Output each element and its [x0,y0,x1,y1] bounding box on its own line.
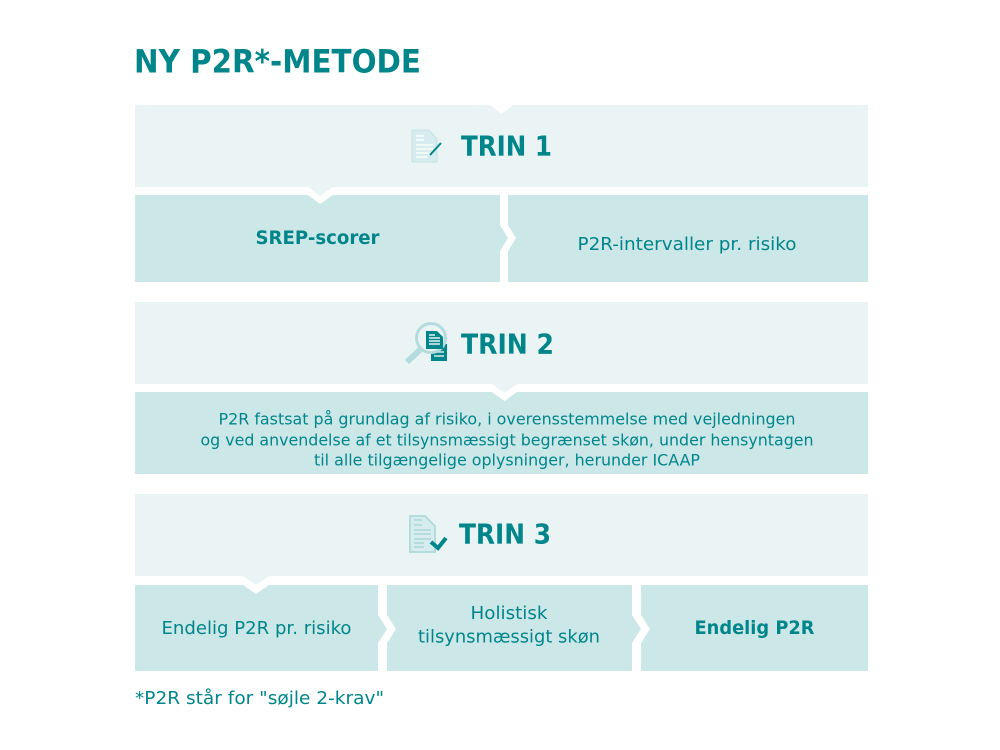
icon: document with check mark [410,516,446,552]
panel: trin 2 description: P2R fastsat på grundlag af risiko, i overensstemmelse med vejledningen [218,410,796,428]
panel: SREP-scorer: SREP-scorer [256,227,380,249]
heading: trin 2: TRIN 2 [461,328,554,360]
panel: P2R-intervaller pr. risiko: P2R-intervaller pr. risiko [578,234,796,255]
heading: trin 3: TRIN 3 [459,518,551,550]
panel: endelig P2R pr. risiko [135,585,387,671]
panel: trin 2 header [135,302,868,393]
title: NY P2R*-METODE [134,42,421,80]
panel: holistisk tilsynsmæssigt skøn [387,585,641,671]
heading: trin 1: TRIN 1 [461,130,552,162]
footnote: *P2R står for "søjle 2-krav" [135,688,384,709]
panel: holistisk tilsynsmæssigt skøn: tilsynsmæssigt skøn [418,626,600,648]
panel: endelig P2R [641,585,868,671]
icon: document with pen [412,130,441,162]
panel: holistisk tilsynsmæssigt skøn: Holistisk [470,603,548,624]
panel: P2R-intervaller pr. risiko [508,195,868,282]
panel: SREP-scorer [135,195,508,282]
panel: trin 2 description: og ved anvendelse af et tilsynsmæssigt begrænset skøn, under hensyntagen [200,430,814,450]
panel: trin 1 header [135,105,868,196]
panel: trin 2 description: til alle tilgængelige oplysninger, herunder ICAAP [314,450,700,470]
panel: endelig P2R: Endelig P2R [694,617,815,639]
panel: trin 3 header [135,494,868,585]
icon: magnifying glass over documents [407,324,447,362]
panel: endelig P2R pr. risiko: Endelig P2R pr. risiko [162,618,352,639]
panel: trin 2 description [135,392,868,474]
